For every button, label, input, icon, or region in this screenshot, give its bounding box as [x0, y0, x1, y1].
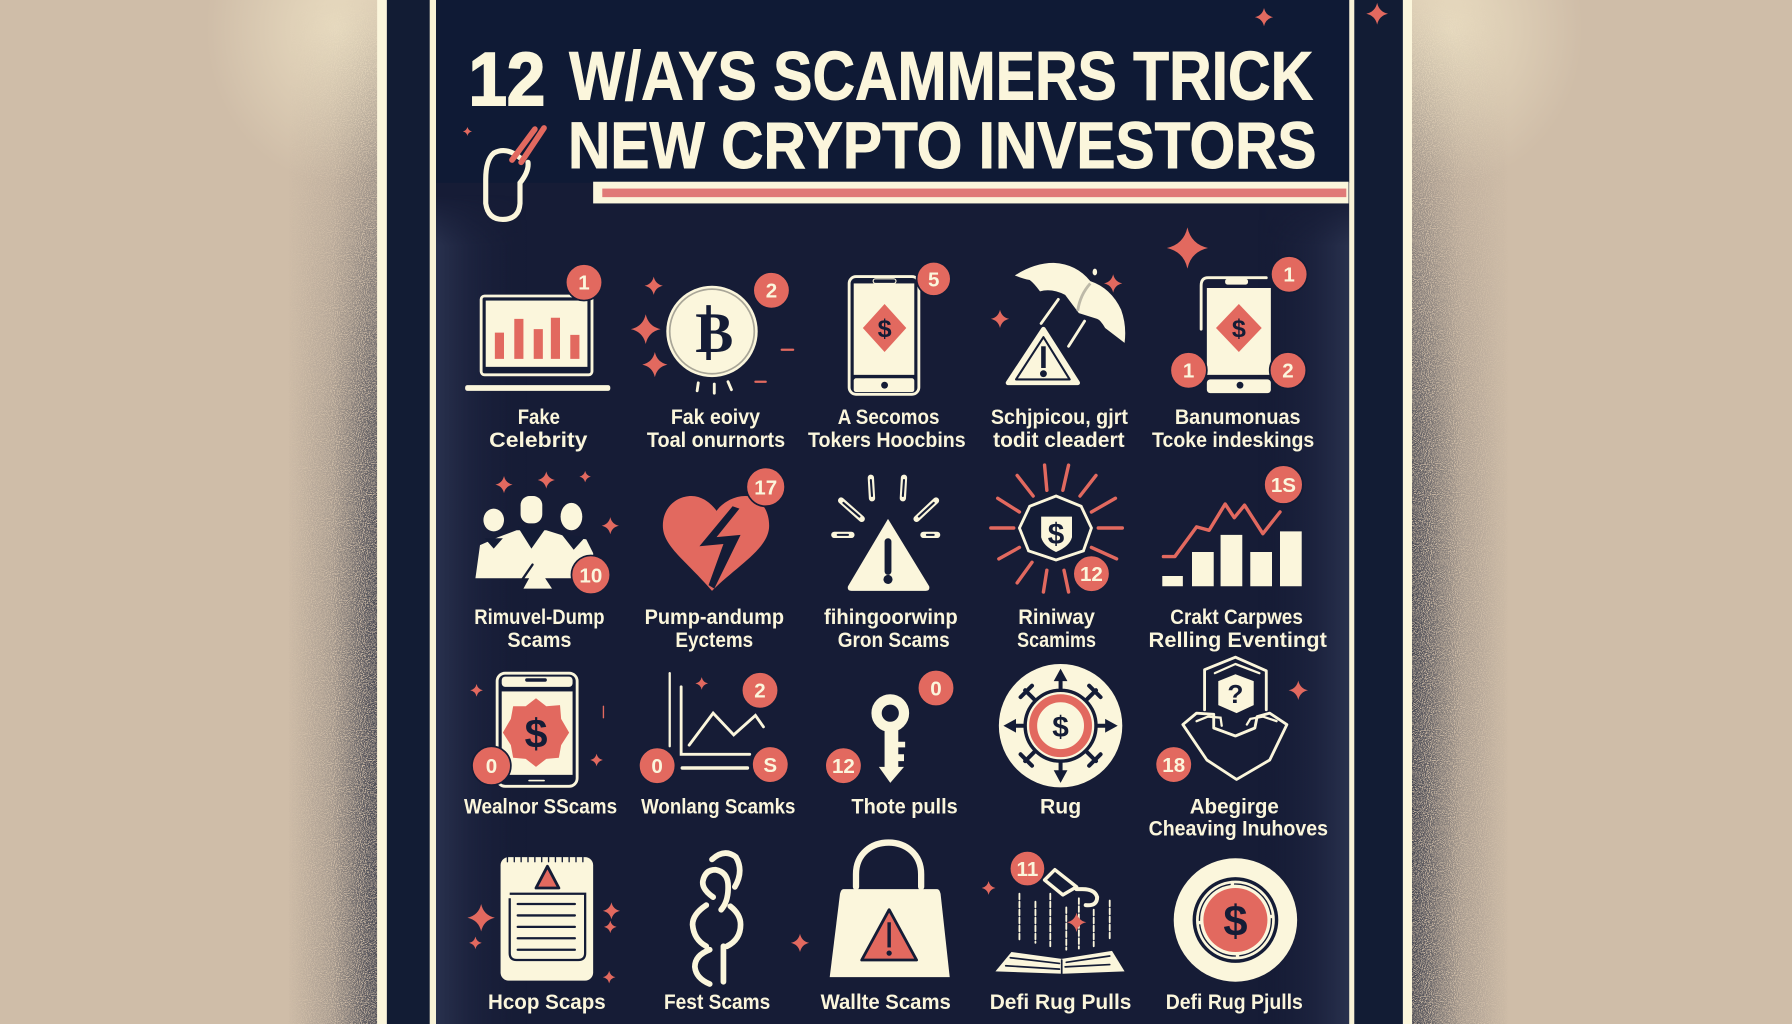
label: Thote pulls [851, 796, 958, 819]
panel: token indexing [1152, 256, 1314, 452]
icon: chain [693, 853, 741, 984]
icon: line chart [670, 673, 763, 768]
icon: coin [631, 277, 793, 393]
poster frame [377, 0, 1412, 1024]
icon: coin with dollar [1174, 858, 1297, 982]
icon: shield with question mark [1183, 657, 1308, 779]
badge [917, 262, 951, 296]
badges: 2 [754, 680, 766, 703]
badge: 0 [486, 755, 497, 778]
badge [753, 272, 790, 309]
label: Fake [518, 406, 560, 429]
label: Wonlang Scamks [641, 796, 795, 819]
label [1149, 606, 1327, 652]
icon: round coin with arrows: $ [1052, 711, 1069, 744]
panel: token pulls [825, 670, 958, 819]
panel: people [474, 471, 619, 652]
label: Schjpicou, gjrt [991, 406, 1128, 429]
label [808, 406, 966, 452]
panel: phishing [824, 478, 958, 652]
panel: fake bitcoin endorsements [631, 272, 793, 452]
label [474, 606, 605, 652]
panel: fest scams [664, 853, 770, 1014]
badges: 1 [1283, 264, 1295, 287]
label [1152, 406, 1314, 452]
badge: 12 [1080, 563, 1103, 586]
label: Cheaving Inuhoves [1149, 817, 1328, 840]
label: A Secomos [838, 406, 939, 429]
badges: 2 [1282, 360, 1294, 383]
badge [1073, 555, 1110, 592]
icon: open book with chain [982, 870, 1125, 974]
decorative sparkles [463, 3, 1388, 269]
panel: token hoaxes [808, 262, 966, 452]
panel: wallet scams [791, 843, 951, 1014]
icon: phone: $ [878, 315, 892, 343]
badge [571, 555, 610, 594]
badge [566, 264, 602, 301]
label: Tcoke indeskings [1152, 429, 1314, 452]
badges [639, 672, 789, 784]
label [1017, 606, 1096, 652]
label: Riniway [1018, 606, 1095, 629]
icon: round coin with arrows [999, 664, 1122, 787]
badges: S [763, 754, 777, 777]
badge: 10 [579, 564, 602, 587]
panel: cheating schemes [1149, 657, 1328, 840]
badge: 1S [1271, 474, 1296, 497]
label: Fak eoivy [671, 406, 760, 429]
panel: runaway scams [991, 465, 1122, 652]
badge [1155, 746, 1192, 783]
icon: phone: $ [1232, 315, 1246, 343]
label: Rimuvel-Dump [474, 606, 605, 629]
icon: bar chart with red trend line [1162, 504, 1302, 586]
icon: broken heart [663, 496, 769, 591]
label: fihingoorwinp [824, 606, 958, 629]
title: 12 [469, 37, 545, 121]
title underline [593, 182, 1349, 203]
label: Wallte Scams [821, 991, 951, 1014]
label: Defi Rug Pulls [990, 991, 1131, 1014]
badge: 5 [928, 268, 939, 291]
label: Rug [1040, 796, 1081, 819]
icon: laptop [465, 296, 610, 391]
icon: phone [1201, 278, 1271, 393]
panel: wealth scams [464, 673, 617, 819]
title: W/AYS SCAMMERS TRICK [569, 37, 1313, 114]
label: Scams [507, 629, 571, 652]
icon: group of people [475, 471, 619, 589]
badges [825, 670, 954, 784]
label [1149, 796, 1328, 840]
panel: working scams [639, 672, 795, 819]
title: NEW CRYPTO INVESTORS [568, 109, 1317, 183]
icon: shield with radiating lines [991, 465, 1122, 592]
label [647, 406, 785, 452]
icon: broken chain beside title [486, 128, 544, 219]
label: Gron Scams [838, 629, 950, 652]
label [991, 406, 1128, 452]
icon: shield with question mark: ? [1227, 679, 1243, 709]
label: Fest Scams [664, 991, 770, 1014]
label: Tokers Hoocbins [808, 429, 966, 452]
label: Defi Rug Pjulls [1166, 991, 1303, 1014]
background wall [240, 0, 1548, 1024]
panel: fake celebrity [465, 264, 610, 452]
label: Crakt Carpwes [1170, 606, 1303, 629]
badge: 11 [1017, 858, 1038, 881]
label: Abegirge [1190, 796, 1279, 819]
label: Celebrity [489, 429, 588, 452]
label [645, 606, 784, 652]
badge: 17 [754, 476, 777, 499]
badge [746, 467, 785, 506]
icon: umbrella and warning sign [991, 263, 1125, 383]
icon: warning triangle with rays [834, 478, 937, 591]
label [489, 406, 588, 452]
panel: crash chart [1149, 465, 1327, 652]
badge: 1 [578, 272, 590, 295]
badge: 2 [766, 280, 777, 303]
panel: suspicious gift [991, 263, 1128, 452]
icon: shield with radiating lines: $ [1048, 518, 1065, 551]
label: Pump-andump [645, 606, 784, 629]
label: Scamims [1017, 629, 1096, 652]
icon: phone with starburst: $ [525, 710, 548, 756]
icon: coin with dollar: $ [1223, 898, 1247, 946]
badge [1010, 851, 1045, 886]
badge: 18 [1162, 754, 1185, 777]
label: Wealnor SScams [464, 796, 617, 819]
icon: key [877, 699, 905, 783]
panel: pump and dump [645, 467, 785, 652]
title [469, 37, 1317, 183]
icon: padlock bag with warning [791, 843, 950, 977]
panel: defi rug pulls coin [1166, 858, 1303, 1014]
panel: hoop scams [467, 857, 620, 1014]
badges: 1 [1183, 360, 1194, 383]
badges: 0 [651, 755, 663, 778]
icon: phone with starburst [470, 673, 603, 786]
badges [1170, 256, 1307, 389]
badge [1264, 465, 1303, 504]
badge [472, 746, 511, 785]
label: Hcop Scaps [488, 991, 606, 1014]
label: Toal onurnorts [647, 429, 785, 452]
badges: 12 [832, 755, 855, 778]
icon: coin: B [695, 302, 733, 365]
label: Relling Eventingt [1149, 629, 1327, 652]
icon: phone [849, 277, 919, 394]
label [824, 606, 958, 652]
panel: defi rug pulls book [982, 851, 1131, 1014]
icon: notepad [467, 857, 620, 983]
label: Banumonuas [1175, 406, 1301, 429]
panel: rug [999, 664, 1122, 819]
label: Eyctems [675, 629, 753, 652]
badges: 0 [930, 677, 942, 700]
label: todit cleadert [993, 429, 1125, 452]
